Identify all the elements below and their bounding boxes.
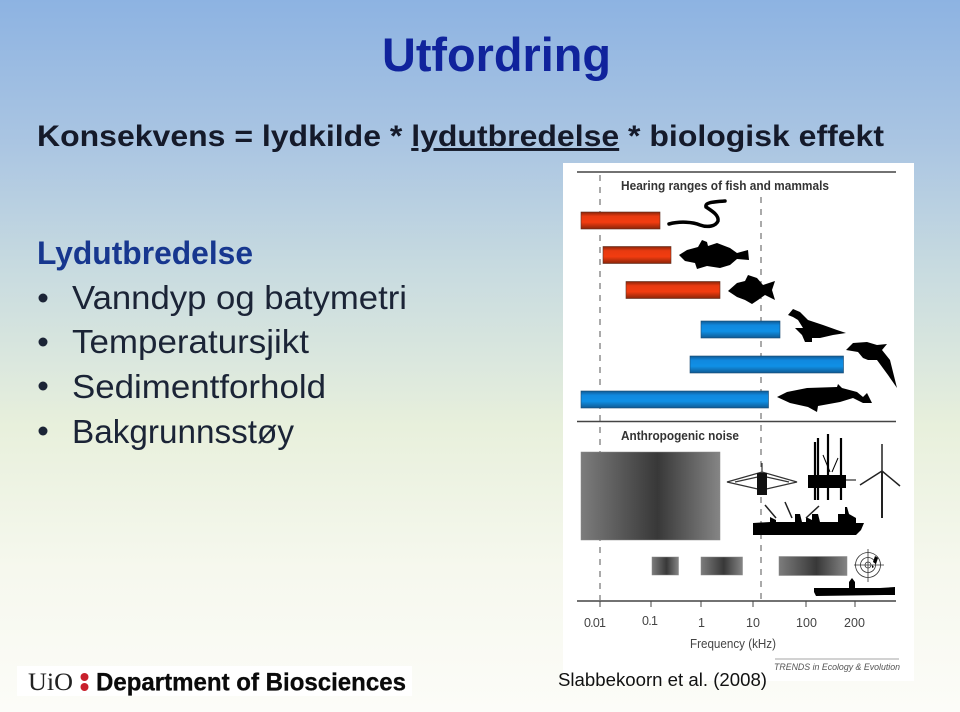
- icon: wind turbine: [860, 444, 900, 518]
- logo: UiO Department of Biosciences: UiO: [28, 669, 73, 696]
- icon: eel: [669, 201, 725, 226]
- frequency axis: 0.01: [584, 616, 606, 630]
- frequency axis: 10: [746, 616, 760, 630]
- list item 3: Sedimentforhold: [72, 368, 326, 405]
- citation: Slabbekoorn et al. (2008): [558, 669, 767, 690]
- icon: cod: [679, 240, 749, 269]
- icon: ship: [753, 507, 864, 535]
- title: Utfordring: [382, 28, 611, 81]
- icon: whale: [777, 384, 872, 412]
- list item 4: Bakgrunnsstøy: [72, 413, 295, 450]
- icon: seal: [788, 309, 846, 342]
- icon: oil rig: [808, 434, 856, 500]
- logo: UiO Department of Biosciences: Department of Biosciences: [96, 668, 406, 696]
- frequency axis: 1: [698, 616, 705, 630]
- icon: platform: [727, 463, 797, 495]
- list: sound propagation: [37, 235, 407, 450]
- section heading: hearing: Hearing ranges of fish and mammals: [621, 179, 829, 193]
- frequency axis: 200: [844, 616, 865, 630]
- icon: submarine: [814, 578, 895, 596]
- chart panel: hearing ranges and noise: [563, 163, 914, 681]
- fish bars: [581, 212, 720, 298]
- journal credit: TRENDS in Ecology & Evolution: [774, 662, 900, 673]
- icon: sonar target: [854, 549, 884, 582]
- list heading: Lydutbredelse: [37, 235, 253, 271]
- axis label: Frequency (kHz): [690, 637, 776, 651]
- frequency axis: [584, 601, 865, 651]
- noise bars: [581, 452, 847, 576]
- formula heading: Konsekvens = lydkilde * lydutbredelse * biologisk effekt: [37, 120, 884, 153]
- axis rules: [577, 172, 896, 601]
- icon: perch: [728, 275, 775, 304]
- frequency axis: 0.1: [642, 614, 658, 628]
- frequency axis: 100: [796, 616, 817, 630]
- section heading: noise: Anthropogenic noise: [621, 429, 739, 443]
- list item 2: Temperatursjikt: [72, 323, 309, 360]
- mammal bars: [581, 321, 844, 408]
- list item 1: Vanndyp og batymetri: [72, 279, 407, 316]
- icon: dolphin: [846, 342, 897, 388]
